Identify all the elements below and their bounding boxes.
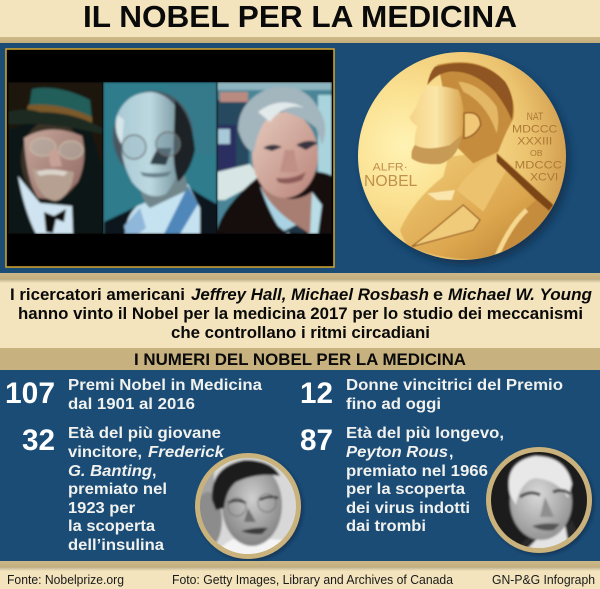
medal inscription right: XXXIII — [517, 136, 552, 148]
footer credits: GN-P&G Infograph — [492, 572, 595, 587]
footer credits: Fonte: Nobelprize.org — [7, 572, 124, 587]
tan divider bottom — [0, 561, 600, 571]
stat: 107: 107 — [5, 377, 55, 410]
panel: blue photo area — [0, 43, 600, 273]
medal bust — [400, 62, 553, 259]
intro text block: Jeffrey Hall, Michael Rosbash — [191, 285, 429, 304]
title band — [0, 0, 600, 38]
stat: 12: 12 — [300, 377, 333, 410]
icon: Nobel gold medal — [358, 52, 570, 265]
footer credits: Foto: Getty Images, Library and Archives of Canada — [172, 572, 454, 587]
stat: 32 — [22, 424, 225, 554]
stat: 107: dal 1901 al 2016 — [68, 396, 195, 413]
group photo of the three winners — [6, 49, 334, 267]
stat: 107: Premi Nobel in Medicina — [68, 377, 262, 394]
stat: 32: G. Banting — [68, 463, 152, 480]
portrait: Michael Rosbash — [103, 82, 217, 234]
stat: 32: premiato nel — [68, 481, 167, 498]
medal inscription right: XCVI — [530, 172, 558, 184]
stat: 87: dai trombi — [346, 518, 426, 535]
medal inscription right: MDCCC — [512, 123, 557, 135]
medal inscription right: MDCCC — [515, 160, 562, 172]
medal inscription right — [512, 111, 562, 184]
tan divider under photos — [0, 273, 600, 283]
stat: 87: per la scoperta — [346, 481, 465, 498]
stat: 32: la scoperta — [68, 518, 155, 535]
medal inscription right: OB — [530, 148, 543, 158]
medal inscription left: ALFR· — [373, 162, 408, 174]
panel: Nobel numbers — [0, 370, 600, 561]
portrait: Jeffrey Hall — [8, 82, 103, 234]
title: IL NOBEL PER LA MEDICINA — [83, 0, 517, 34]
intro text block: Michael W. Young — [448, 285, 593, 304]
stat: 32: , — [152, 463, 156, 480]
medal inscription left: NOBEL — [364, 173, 418, 190]
section heading band — [0, 348, 600, 370]
stat: 12 — [300, 377, 563, 413]
tan divider top — [0, 37, 600, 43]
stat: 87 — [300, 424, 504, 535]
stat: 32: Età del più giovane — [68, 425, 221, 442]
intro text block — [10, 285, 593, 342]
stat: 87: 87 — [300, 424, 333, 457]
stat: 87: Peyton Rous — [346, 444, 448, 461]
intro text block: I ricercatori americani — [10, 285, 185, 304]
stat: 32: dell’insulina — [68, 537, 164, 554]
medal inscription right: NAT — [527, 111, 543, 123]
stat: 12: Donne vincitrici del Premio — [346, 377, 563, 394]
portrait: Frederick G. Banting — [194, 453, 303, 561]
stat: 32: vincitore, — [68, 444, 142, 461]
stat: 87: premiato nel 1966 — [346, 463, 488, 480]
stat: 87: , — [449, 444, 453, 461]
footer credits — [7, 572, 595, 587]
intro text block: che controllano i ritmi circadiani — [171, 323, 430, 342]
portrait: Peyton Rous — [486, 447, 594, 555]
intro text block: e — [433, 285, 443, 304]
medal inscription left — [364, 162, 418, 190]
stat: 32: 1923 per — [68, 500, 135, 517]
stat: 87: dei virus indotti — [346, 500, 470, 517]
stat: 32: 32 — [22, 424, 55, 457]
intro text block: hanno vinto il Nobel per la medicina 2017 per lo studio dei meccanismi — [18, 304, 583, 323]
stat: 12: fino ad oggi — [346, 396, 441, 413]
stat: 87: Età del più longevo, — [346, 425, 504, 442]
section heading: I NUMERI DEL NOBEL PER LA MEDICINA — [134, 350, 466, 369]
stat: 107 — [5, 377, 262, 413]
portrait: Michael Young — [216, 82, 332, 234]
stat: 32: Frederick — [148, 444, 225, 461]
